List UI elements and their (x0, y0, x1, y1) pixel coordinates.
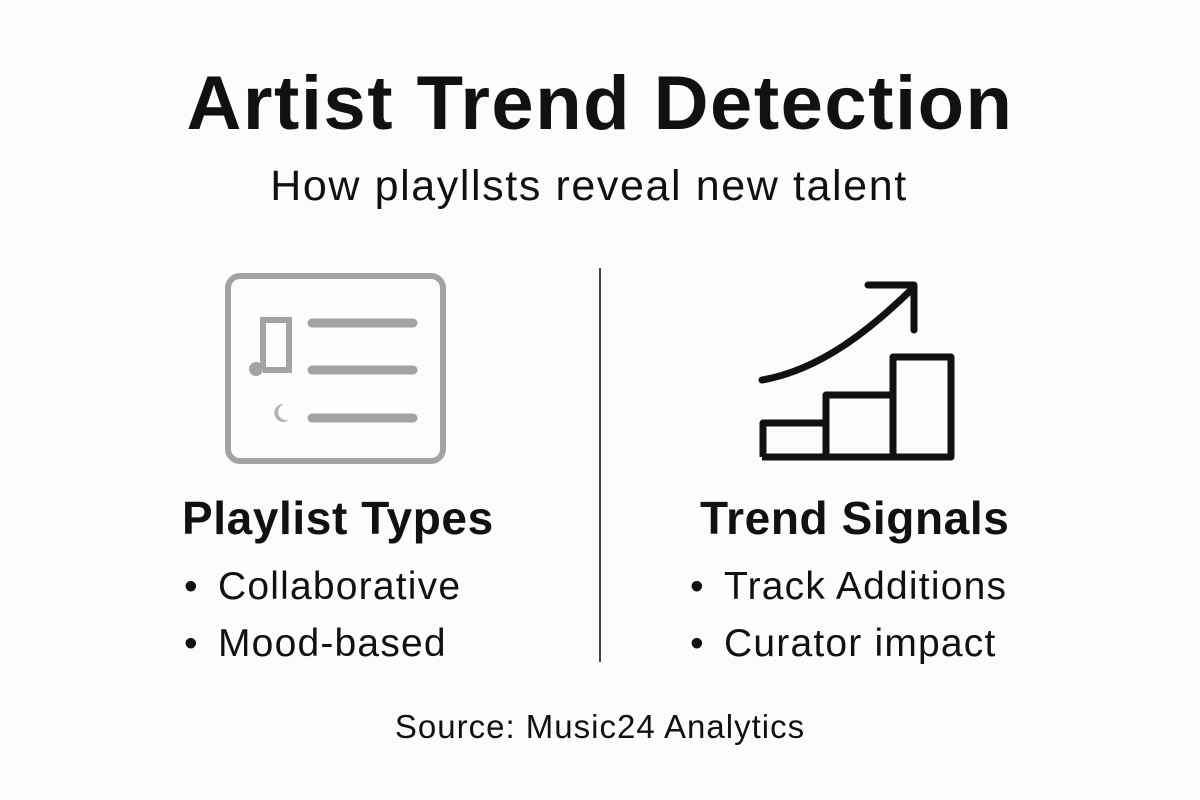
source: Source: Music24 Analytics (395, 708, 805, 745)
divider (599, 268, 601, 662)
bullet list: Curator impact (724, 622, 997, 665)
title: Artist Trend Detection (187, 61, 1013, 146)
panel: trend signals (690, 282, 1009, 665)
heading: Playlist Types (182, 492, 494, 544)
bullet list: • (690, 565, 705, 608)
panel: playlist types (182, 273, 494, 665)
subtitle: How playllsts reveal new talent (270, 162, 908, 210)
heading: Trend Signals (700, 492, 1009, 544)
bullet list (184, 565, 461, 665)
bullet list: • (690, 622, 705, 665)
bullet list (690, 565, 1007, 665)
icon: growth chart (758, 282, 954, 460)
bullet list: Mood-based (218, 622, 447, 665)
bullet list: Collaborative (218, 565, 461, 608)
bullet list: • (184, 565, 199, 608)
bullet list: • (184, 622, 199, 665)
bullet list: Track Additions (724, 565, 1007, 608)
icon: playlist (225, 273, 446, 464)
